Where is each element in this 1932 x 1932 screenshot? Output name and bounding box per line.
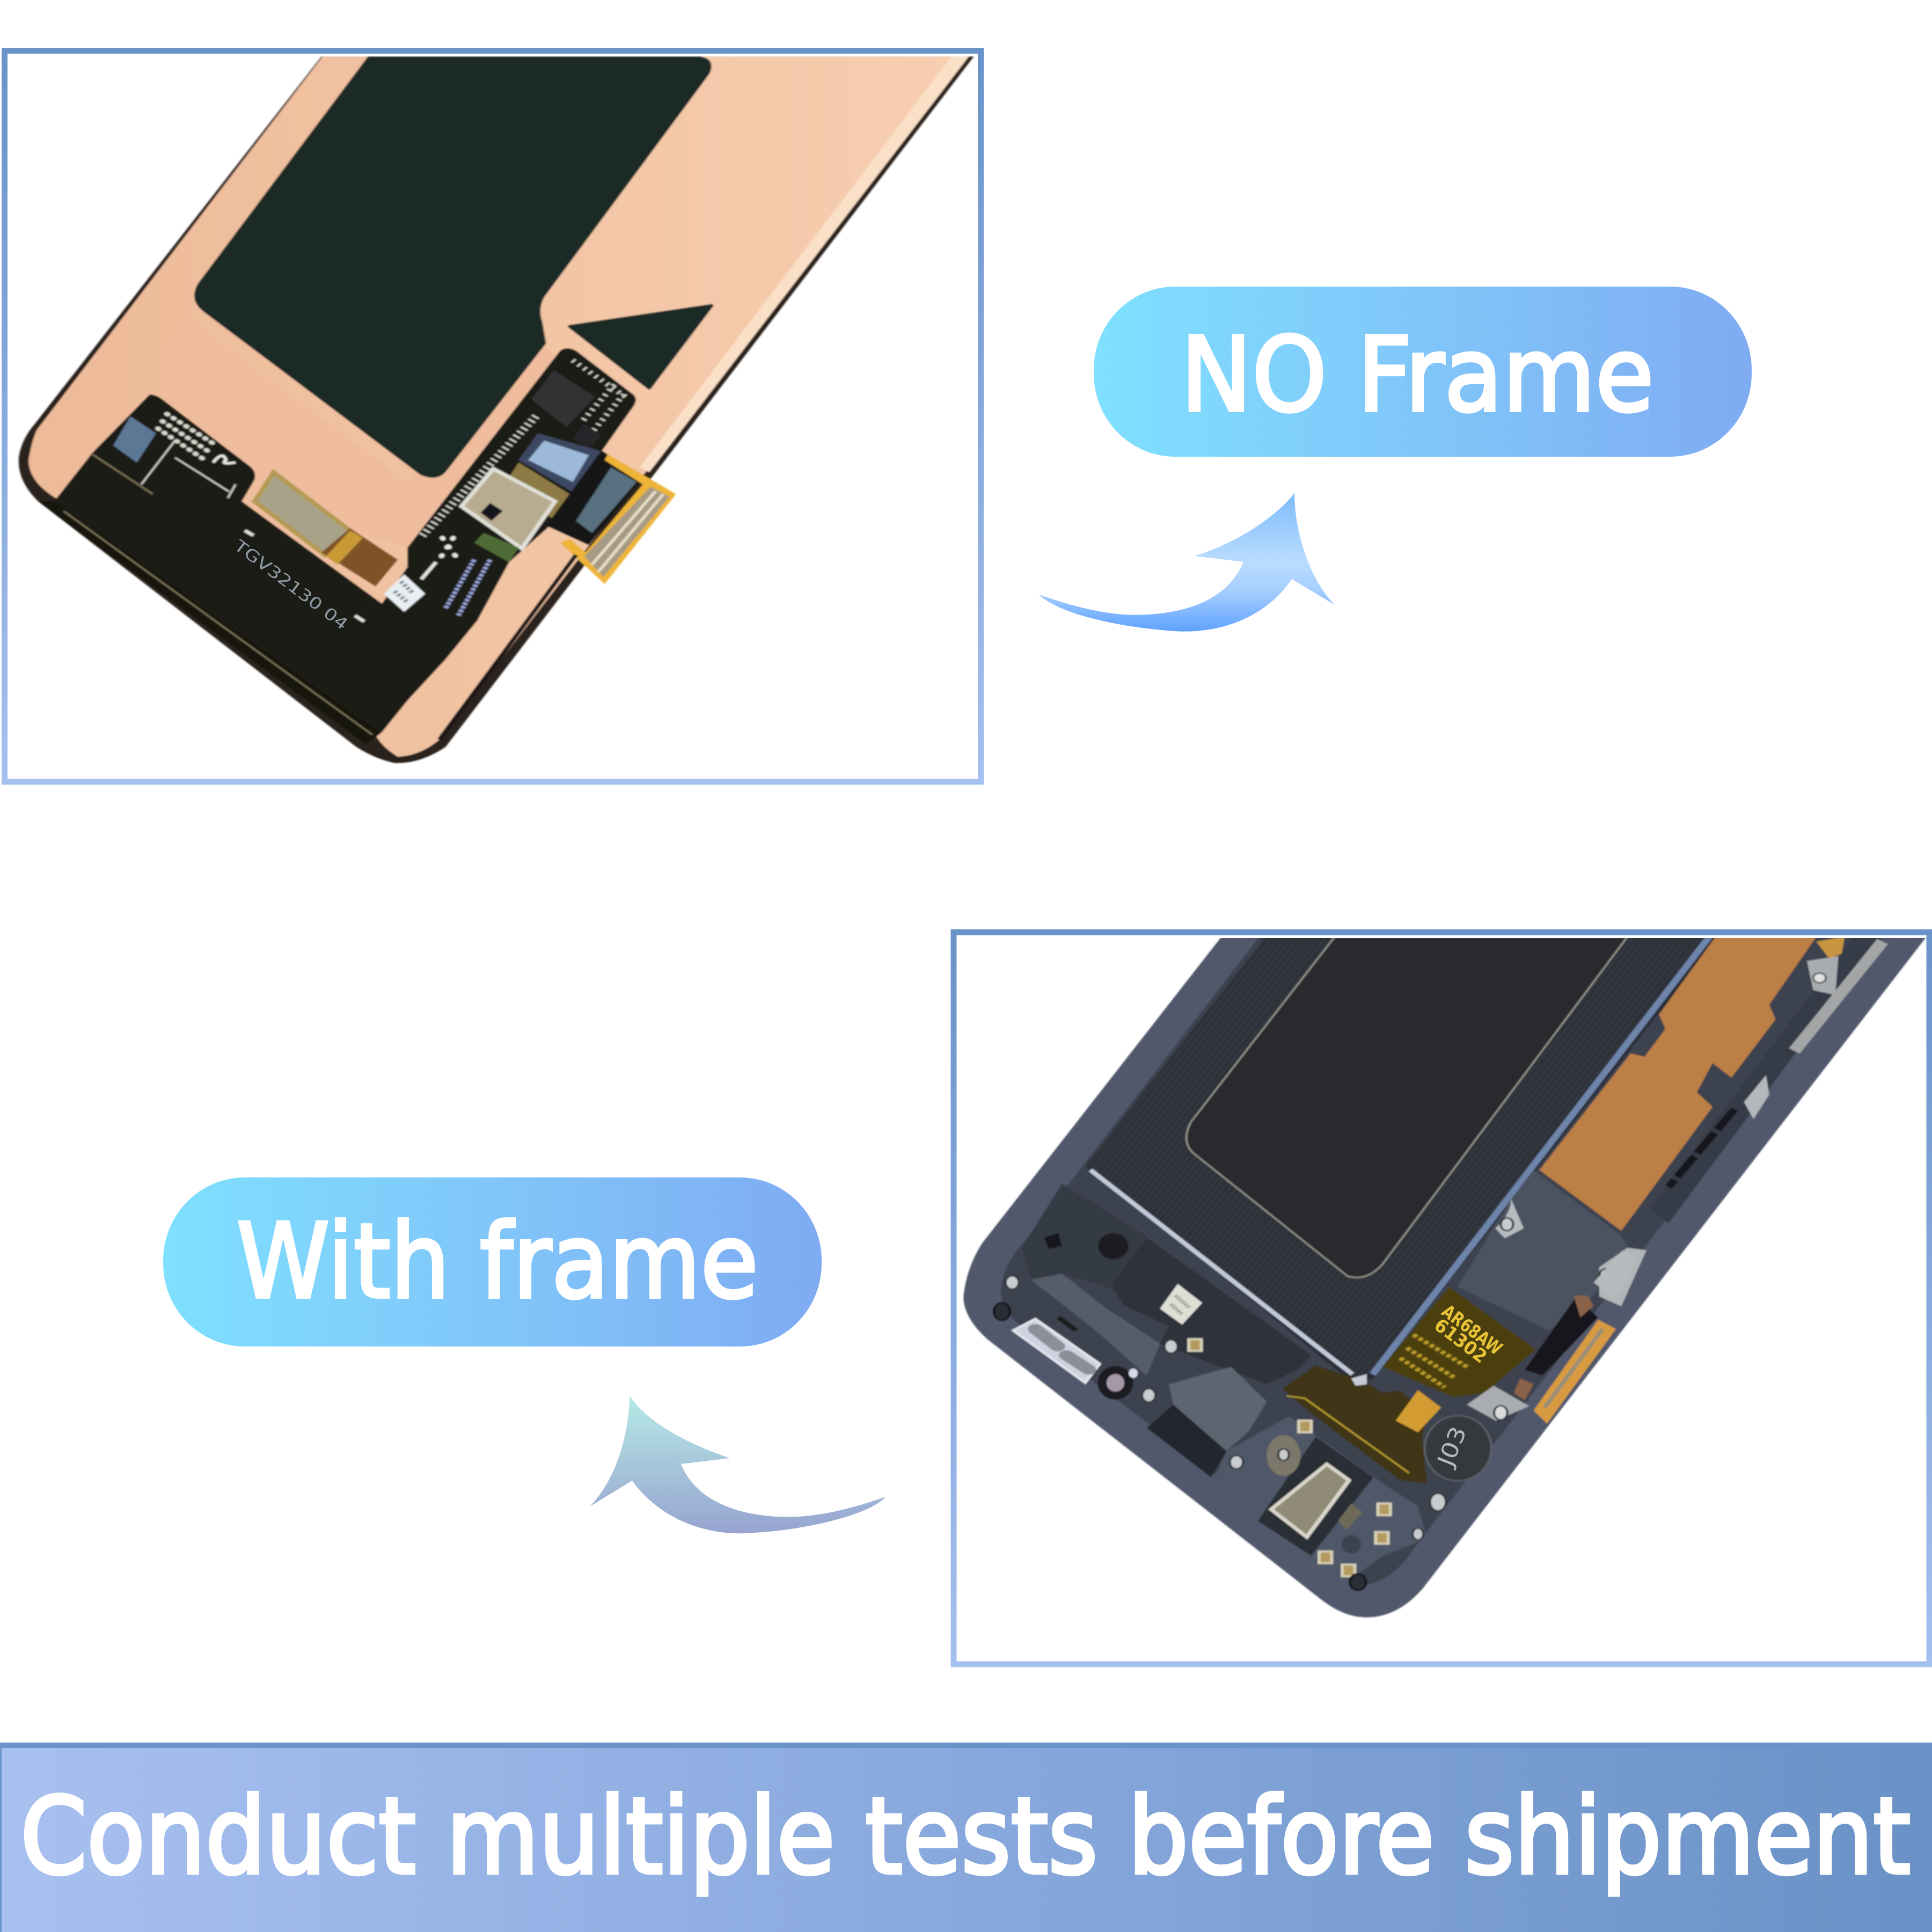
fine print block bbox=[445, 560, 490, 616]
side rail bbox=[1650, 936, 1883, 1224]
grey lower chassis bbox=[1213, 1416, 1427, 1582]
stripe contact row bbox=[420, 416, 536, 538]
yellow patch bbox=[1396, 1390, 1441, 1432]
pill: NO Frame bbox=[1094, 287, 1752, 457]
upper bracket bbox=[1807, 956, 1839, 995]
bracket screw bbox=[1813, 973, 1826, 983]
board label lines bbox=[141, 441, 236, 498]
QR pattern frame bbox=[1171, 1296, 1189, 1314]
vibration motor bbox=[1425, 1416, 1491, 1481]
pill: NO Frame: NO Frame bbox=[1181, 316, 1654, 435]
connector bbox=[584, 487, 670, 577]
inner rim pocket bbox=[1086, 936, 1719, 1384]
USB port surround bbox=[1258, 1437, 1373, 1556]
banner bbox=[0, 1743, 1932, 1932]
hole right bbox=[1098, 1233, 1128, 1259]
blue sticker bbox=[519, 433, 602, 494]
silver module bbox=[462, 469, 555, 548]
silver lower bracket bbox=[1467, 1386, 1529, 1421]
copper highlight bbox=[640, 56, 969, 472]
screws bbox=[1006, 1218, 1612, 1540]
right dot grid bbox=[573, 361, 627, 431]
logo mark bbox=[213, 456, 236, 463]
panel: with-frame photo bbox=[954, 932, 1929, 1664]
silver rod bbox=[1795, 941, 1883, 1051]
dark flex bbox=[546, 450, 643, 545]
grey chassis pocket bbox=[1458, 1170, 1628, 1330]
front camera bbox=[1097, 1366, 1133, 1400]
flex ends bbox=[1513, 1296, 1594, 1400]
flex blue panel bbox=[576, 467, 636, 533]
camera lens bbox=[1107, 1374, 1124, 1392]
left camera pocket bbox=[1022, 1183, 1146, 1289]
copper raised panel bbox=[162, 319, 560, 547]
plate bottom bright edge bbox=[1091, 1170, 1352, 1374]
striated plate bbox=[1086, 936, 1709, 1377]
lower edge shadow bbox=[38, 501, 382, 744]
orange connector bbox=[1534, 1320, 1616, 1424]
screw clip bbox=[1495, 1199, 1524, 1238]
QR sticker frame bbox=[1160, 1284, 1202, 1324]
orange green traces bbox=[503, 463, 569, 518]
gold pads bbox=[1189, 1339, 1391, 1576]
brown sensor flex bbox=[321, 528, 398, 587]
silver bracket bbox=[1594, 1250, 1636, 1297]
hole left bbox=[1044, 1233, 1062, 1249]
plate right bright edge bbox=[1373, 936, 1709, 1374]
frame inner bbox=[1001, 936, 1883, 1586]
triangle sheet bbox=[569, 305, 712, 388]
USB port metal bbox=[1271, 1464, 1349, 1537]
green PCB bbox=[474, 533, 519, 562]
board dots bbox=[158, 414, 216, 460]
olive FPC label bbox=[1382, 1287, 1536, 1397]
yellow flex bbox=[560, 454, 676, 584]
dark pocket middle bbox=[1111, 1238, 1311, 1384]
yellow label text line 2: 61302 bbox=[1430, 1314, 1491, 1368]
speaker block bbox=[1146, 1404, 1227, 1477]
QR sticker bbox=[384, 574, 425, 612]
mesh slot 1 bbox=[1035, 1329, 1058, 1346]
mottled grey block bbox=[1169, 1367, 1267, 1451]
copper back sheet bbox=[28, 56, 966, 757]
mesh slot 2 bbox=[1066, 1355, 1089, 1370]
earpiece mesh bbox=[1013, 1319, 1100, 1383]
flex batch text: TGV32130 04 bbox=[230, 536, 352, 634]
data matrix bbox=[113, 416, 156, 463]
arrow: to With frame bbox=[590, 1395, 885, 1533]
pill: With frame bbox=[163, 1177, 822, 1346]
yellow label text line 1: AR68AW bbox=[1438, 1300, 1506, 1359]
board gold hairline bbox=[64, 454, 372, 735]
upper mid bracket bbox=[1599, 1248, 1646, 1306]
battery sheet bbox=[194, 56, 712, 478]
sensor pill bbox=[1129, 1368, 1138, 1378]
motor text: J03 bbox=[1432, 1423, 1472, 1472]
small chip bbox=[573, 423, 602, 449]
copper plate bbox=[1539, 936, 1817, 1231]
connector stripes bbox=[592, 491, 663, 572]
screw pad USB bbox=[1267, 1435, 1300, 1476]
arrow: to NO Frame bbox=[1039, 493, 1335, 632]
slit bbox=[1058, 1318, 1076, 1330]
olive flex bbox=[1282, 1365, 1427, 1483]
screen panel bbox=[1187, 936, 1628, 1277]
small dot bbox=[1342, 1535, 1361, 1554]
black flex board bbox=[54, 348, 636, 733]
vent slots bbox=[1668, 1109, 1735, 1187]
module lens bbox=[480, 503, 503, 521]
white marks bbox=[245, 531, 436, 621]
chip bbox=[531, 370, 595, 427]
USB side block bbox=[1338, 1504, 1363, 1529]
black rings bbox=[994, 1303, 1366, 1590]
QR pattern bbox=[394, 582, 414, 602]
silver clip bbox=[1744, 1075, 1769, 1119]
pill: With frame: With frame bbox=[237, 1202, 758, 1322]
white dots bbox=[439, 538, 458, 560]
mottled chassis left bbox=[1031, 1274, 1160, 1375]
frame body bbox=[963, 936, 1927, 1618]
body edge below connector bbox=[439, 555, 576, 740]
gold fingerprint sensor bbox=[254, 472, 350, 555]
camera flex black bbox=[1525, 1297, 1598, 1375]
gold tab bbox=[1817, 936, 1845, 958]
olive flex edge bbox=[1287, 1396, 1409, 1473]
plate tip screw bbox=[1351, 1374, 1367, 1386]
connector stripes frame bbox=[1545, 1329, 1602, 1408]
faint yellow print bbox=[1400, 1335, 1467, 1387]
screw on lower bracket bbox=[1494, 1406, 1507, 1420]
blue sticker window bbox=[528, 441, 589, 482]
phone body silhouette bbox=[19, 56, 974, 763]
panel: no-frame photo bbox=[4, 50, 981, 781]
gold flex highlight bbox=[326, 531, 363, 565]
